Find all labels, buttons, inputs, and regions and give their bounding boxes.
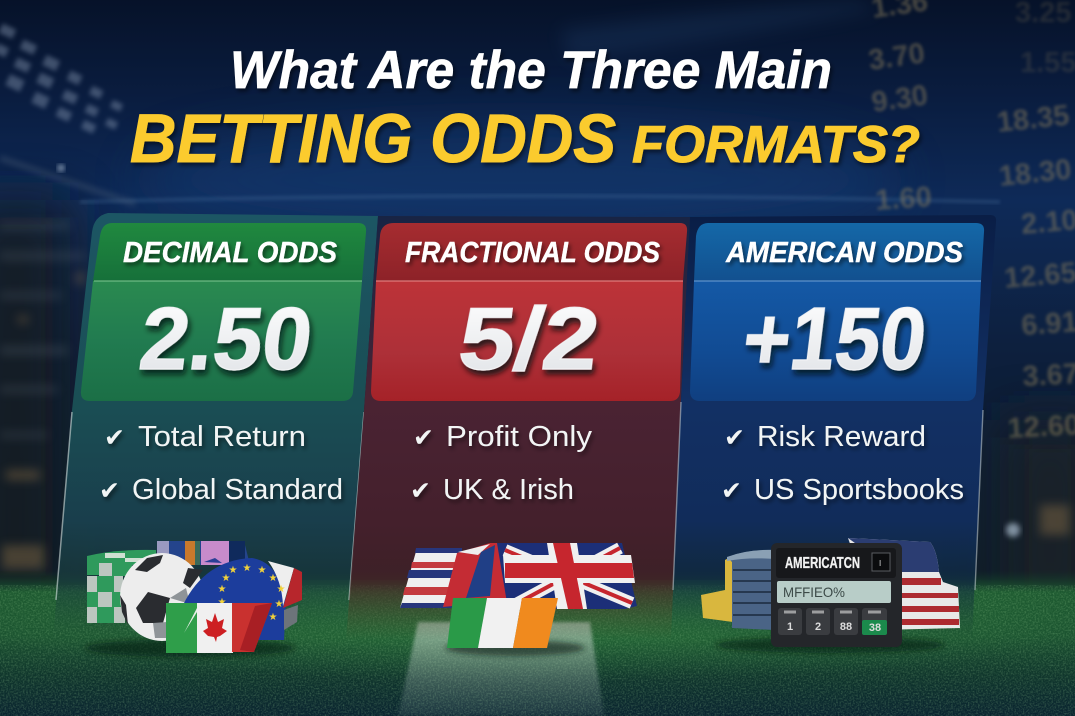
grass field [0,570,1075,716]
icon: chips, ball and flags: ★ [269,612,278,623]
calculator keys: 38 [869,622,881,634]
icon: chips, ball and flags [85,541,302,657]
background: blurred odds numbers: 18.35 [995,100,1071,139]
bullet: UK and Irish: UK & Irish [443,474,574,506]
EU flag [183,558,286,640]
icon: chips, ball and flags: ★ [275,599,284,610]
icon: UK and Irish flags [400,543,637,656]
icon: chips, calculator and US flag [701,538,960,653]
title line 2 [130,100,920,177]
heading: DECIMAL ODDS [123,237,338,269]
value box [371,281,683,401]
UK flag [497,543,637,609]
title line 2: BETTING ODDS [130,100,616,177]
background: blurred odds numbers: 1.60 [874,181,933,217]
icon: chips, calculator and US flag: AMERICATCN [785,555,860,572]
icon: chips, ball and flags: ★ [258,565,267,576]
calculator keys: 88 [840,621,852,633]
panel: american odds [671,215,996,653]
icon: chips, ball and flags: ★ [229,565,238,576]
heading: FRACTIONAL ODDS [405,237,661,269]
panel: decimal odds [53,213,378,657]
value: 5/2 [454,289,605,388]
bullet: profit only: Profit Only [446,421,593,453]
chalk line [398,622,604,716]
title line 1: What Are the Three Main [230,41,832,100]
title line 2: FORMATS? [632,116,920,174]
value: +150 [738,289,932,388]
calculator [771,543,902,647]
panel body [346,216,690,640]
small red and blue flag [443,543,510,607]
header band [694,223,984,281]
panel: fractional odds [346,216,690,656]
panel body [671,215,996,640]
calculator display [777,581,891,603]
background: blurred odds numbers: 3.70 [867,37,927,77]
bullet: profit only: ✔ [413,424,434,452]
bullet: US sportsbooks: US Sportsbooks [754,474,964,506]
bullet: UK and Irish: ✔ [410,477,431,505]
bullet: global standard: ✔ [99,477,120,505]
background: blurred odds numbers: 18.30 [997,154,1073,193]
title [130,41,920,177]
back flags [157,541,250,565]
soccer ball [120,553,204,641]
background: blurred odds numbers: 1.55 [1020,47,1075,79]
Italy and Canada flag [166,603,198,653]
Irish flag [447,598,487,648]
US flag [848,538,960,630]
heading: AMERICAN ODDS [725,237,964,269]
striped flag [400,548,462,608]
background: blurred odds numbers: 9.30 [870,79,930,119]
chip stack [87,550,156,565]
background: left stadium lights [0,24,123,134]
blue chip stack [727,550,775,630]
header band [376,223,687,281]
panel body [53,213,378,640]
icon: chips, calculator and US flag: I [879,559,881,568]
icon: chips, ball and flags: ★ [277,584,286,595]
icon: chips, ball and flags: ★ [243,563,252,574]
icon: chips, calculator and US flag: MFFIEO% [783,584,845,600]
bullet: total return: ✔ [104,424,125,452]
bullet: risk reward: Risk Reward [757,421,926,453]
icon: chips, ball and flags: ★ [218,597,227,608]
bullet: risk reward: ✔ [724,424,745,452]
icon: chips, ball and flags: ★ [218,584,227,595]
bullet: total return: Total Return [138,421,306,453]
calculator keys: 2 [815,621,821,633]
calculator keys: 1 [787,621,793,633]
bullet: US sportsbooks: ✔ [721,477,742,505]
background: blurred odds numbers [867,0,1075,445]
header band [93,223,366,281]
value box [81,281,362,401]
gold chips [701,590,733,622]
calculator keys [778,608,887,635]
icon: chips, ball and flags: ★ [222,573,231,584]
bullet: global standard: Global Standard [132,474,343,506]
value: 2.50 [135,289,318,388]
value box [690,281,981,401]
icon: chips, ball and flags: ★ [269,573,278,584]
